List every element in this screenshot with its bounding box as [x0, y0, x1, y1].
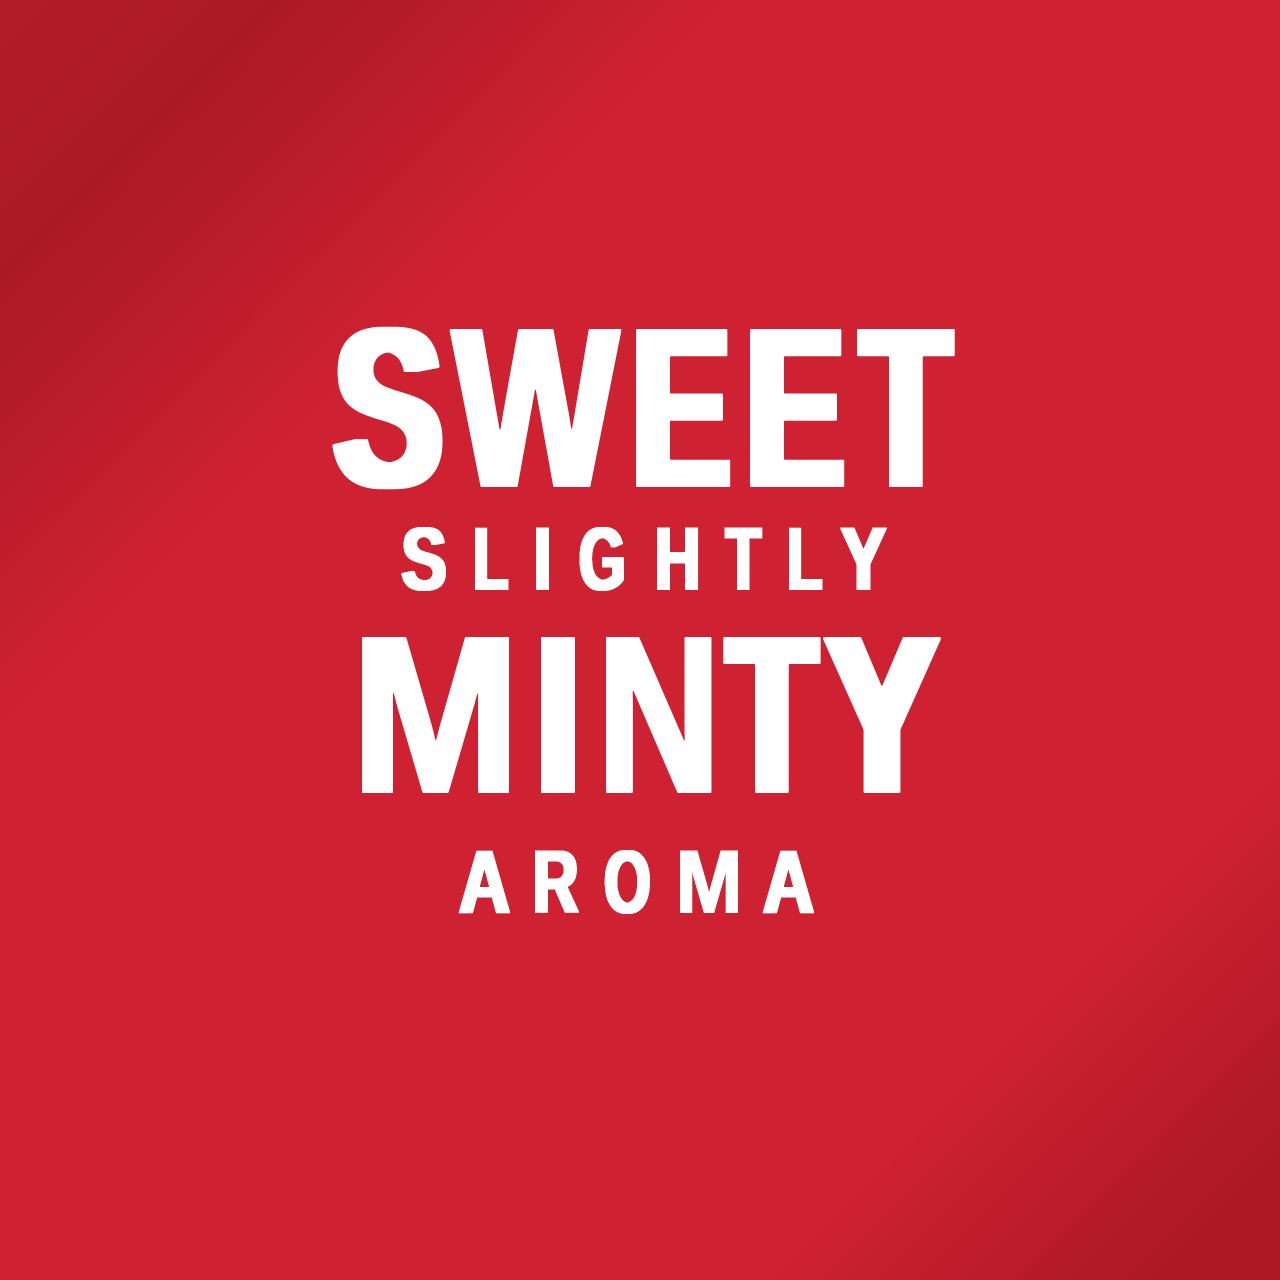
- heading line: SWEET: W: [453, 281, 618, 534]
- text line: SLIGHTLY: S: [401, 509, 447, 609]
- text line: AROMA: A: [459, 833, 510, 933]
- text line: SLIGHTLY: L: [473, 509, 508, 609]
- text line: SLIGHTLY: H: [655, 510, 700, 609]
- text line: AROMA: [459, 832, 814, 933]
- heading line: MINTY: [351, 590, 937, 841]
- text line: AROMA: R: [533, 833, 578, 932]
- text line: AROMA: A: [763, 833, 814, 933]
- heading line: SWEET: [334, 281, 950, 535]
- heading line: MINTY: T: [728, 590, 816, 840]
- text line: AROMA: O: [604, 833, 651, 933]
- text line: SLIGHTLY: L: [787, 509, 822, 609]
- heading line: SWEET: E: [633, 282, 729, 535]
- heading line: SWEET: E: [747, 282, 843, 535]
- text line: SLIGHTLY: [401, 509, 886, 610]
- text line: SLIGHTLY: G: [579, 510, 626, 610]
- heading line: SWEET: T: [862, 282, 950, 535]
- heading line: MINTY: Y: [827, 590, 937, 840]
- text line: SLIGHTLY: T: [726, 509, 761, 609]
- text line: SLIGHTLY: I: [534, 510, 551, 609]
- text line: AROMA: M: [676, 832, 742, 932]
- text line: SLIGHTLY: Y: [841, 510, 886, 609]
- heading line: MINTY: M: [351, 590, 520, 840]
- heading line: MINTY: N: [597, 591, 720, 840]
- heading line: SWEET: S: [334, 281, 442, 534]
- heading line: MINTY: I: [538, 591, 578, 841]
